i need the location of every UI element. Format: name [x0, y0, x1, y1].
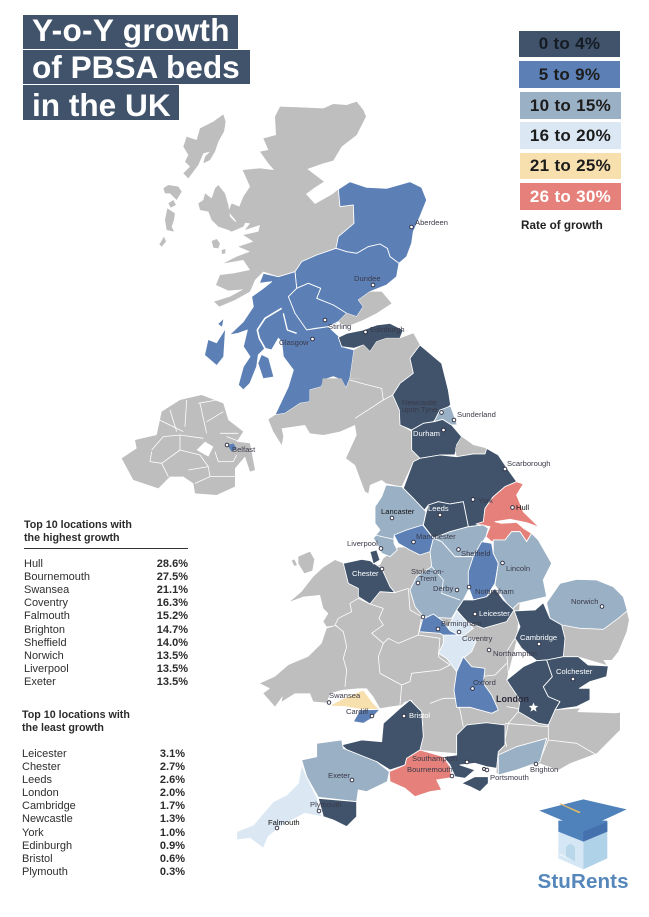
- table: highest growth: Sheffield: [24, 637, 67, 649]
- legend: 10 to 15%: [530, 96, 611, 115]
- table: highest growth: 15.2%: [157, 610, 188, 622]
- region: Colchester: [543, 657, 608, 710]
- region: Nottingham: [468, 542, 498, 600]
- region: Isle of Wight: [462, 777, 488, 792]
- region: Leicester: [457, 588, 514, 628]
- table: highest growth: 27.5%: [157, 571, 188, 583]
- table: least growth: 1.0%: [160, 827, 185, 839]
- region: Dundee: [295, 244, 399, 317]
- region: Sheffield: [433, 525, 488, 557]
- region: Swansea: [329, 690, 380, 710]
- table: highest growth: 13.5%: [157, 663, 188, 675]
- islands: Arran, Islay and Jura: [205, 319, 273, 378]
- city labels: Hull: [516, 503, 529, 512]
- city labels: Sheffield: [461, 549, 490, 558]
- table: least growth: Leeds: [22, 774, 52, 786]
- South West and South Coast regions: [237, 635, 547, 848]
- table: least growth: 0.3%: [160, 866, 185, 878]
- region: Lincoln: [493, 532, 552, 610]
- region: Coventry: [438, 635, 477, 672]
- city labels: Birmingham: [441, 619, 482, 628]
- Wales and West Midlands grey base: [260, 547, 455, 708]
- city labels: Lancaster: [381, 507, 415, 516]
- city labels: Exeter: [328, 771, 350, 780]
- table: least growth: the least growth: [22, 722, 104, 734]
- table: highest growth: 14.0%: [157, 637, 188, 649]
- city labels: Cardiff: [346, 707, 369, 716]
- StuRents logo: [538, 799, 629, 893]
- region: Oxford: [454, 657, 498, 713]
- Northern England regions: [268, 345, 552, 639]
- city labels: upon Tyne: [402, 405, 437, 414]
- region: Chester: [343, 559, 395, 604]
- title: in the UK: [32, 87, 171, 123]
- region: Birmingham: [419, 614, 462, 639]
- legend: 26 to 30%: [530, 187, 611, 206]
- table: least growth: 1.3%: [160, 813, 185, 825]
- city labels: Bournemouth: [407, 765, 453, 774]
- city labels: Chester: [352, 569, 379, 578]
- city labels: Durham: [413, 429, 440, 438]
- city labels: Swansea: [329, 691, 361, 700]
- table: least growth: Newcastle: [22, 813, 73, 825]
- city labels: York: [478, 496, 493, 505]
- city labels: Stoke-on-: [411, 567, 444, 576]
- table: highest growth: Norwich: [24, 650, 64, 662]
- table: highest growth: [24, 519, 188, 688]
- region: Norwich: [547, 579, 627, 629]
- table: least growth: [22, 709, 185, 878]
- table: least growth: London: [22, 787, 59, 799]
- city labels: Colchester: [556, 667, 593, 676]
- table: least growth: 2.0%: [160, 787, 185, 799]
- legend: 0 to 4%: [539, 34, 600, 53]
- legend: 16 to 20%: [530, 126, 611, 145]
- table: least growth: Leicester: [22, 748, 67, 760]
- region: Manchester: [394, 525, 433, 555]
- region: East Anglia south: [562, 611, 629, 665]
- region: Kent and East Sussex: [540, 708, 620, 760]
- region: Bristol: [342, 700, 423, 770]
- table: least growth: 2.6%: [160, 774, 185, 786]
- legend: 21 to 25%: [530, 156, 611, 175]
- region: Bournemouth: [389, 750, 458, 797]
- table: highest growth: Swansea: [24, 584, 69, 596]
- table: highest growth: 13.5%: [157, 676, 188, 688]
- Lough Neagh: [197, 442, 213, 457]
- table: least growth: 0.6%: [160, 853, 185, 865]
- table: highest growth: Brighton: [24, 624, 65, 636]
- region: Cambridge: [514, 603, 565, 661]
- city labels: Southampton: [412, 754, 457, 763]
- city labels: Lincoln: [506, 564, 530, 573]
- table: least growth: Cambridge: [22, 800, 76, 812]
- table: highest growth: Coventry: [24, 597, 68, 609]
- city labels: Norwich: [571, 597, 598, 606]
- table: highest growth: Falmouth: [24, 610, 70, 622]
- table: highest growth: 13.5%: [157, 650, 188, 662]
- city labels: Northampton: [493, 649, 537, 658]
- city labels: Sunderland: [457, 410, 496, 419]
- table: least growth: Edinburgh: [22, 840, 72, 852]
- region: Durham: [412, 419, 462, 458]
- Outer Hebrides and Skye: [159, 114, 247, 254]
- table: least growth: Plymouth: [22, 866, 68, 878]
- city labels: Bristol: [409, 711, 430, 720]
- legend: Rate of growth: [521, 219, 603, 232]
- legend: 5 to 9%: [539, 65, 600, 84]
- region: Plymouth: [318, 798, 357, 827]
- East Anglia and London regions: [480, 579, 629, 760]
- region: Highlands: [214, 102, 366, 307]
- Belfast region: [227, 443, 237, 452]
- region: Sunderland: [434, 406, 457, 425]
- city labels: Edinburgh: [370, 325, 405, 334]
- region: Derby and Stoke: [410, 538, 473, 618]
- table: least growth: 0.9%: [160, 840, 185, 852]
- city labels: Leicester: [479, 609, 510, 618]
- table: highest growth: Exeter: [24, 676, 56, 688]
- city labels: Leeds: [428, 504, 449, 513]
- table: least growth: 2.7%: [160, 761, 185, 773]
- South England grey base: [397, 600, 620, 773]
- Northern Ireland: [122, 395, 255, 495]
- region: Cardiff: [353, 709, 380, 723]
- city labels: Scarborough: [507, 459, 550, 468]
- region: Fife: [338, 292, 392, 327]
- city labels: Liverpool: [347, 539, 378, 548]
- city labels: Dundee: [354, 274, 381, 283]
- region: Leeds: [423, 502, 468, 538]
- region: Newcastle: [393, 345, 451, 430]
- table: highest growth: Hull: [24, 558, 43, 570]
- table: least growth: Bristol: [22, 853, 53, 865]
- city labels: Newcastle: [402, 398, 437, 407]
- city labels: London: [496, 694, 529, 704]
- Scotland regions: [205, 102, 427, 415]
- table: least growth: York: [22, 827, 44, 839]
- region: Falmouth: [237, 765, 322, 848]
- region: Stirling: [288, 283, 347, 330]
- table: least growth: 3.1%: [160, 748, 185, 760]
- table: least growth: Chester: [22, 761, 61, 773]
- title: Y-o-Y growth: [32, 12, 230, 48]
- city labels: Stirling: [328, 322, 351, 331]
- city labels: Nottingham: [475, 587, 514, 596]
- city labels: Derby: [433, 584, 453, 593]
- region: Dumfries and Cumbria: [268, 377, 420, 493]
- region: Teesside: [455, 437, 487, 457]
- city labels: Falmouth: [268, 818, 300, 827]
- title: of PBSA beds: [32, 49, 240, 85]
- table: highest growth: the highest growth: [24, 532, 120, 544]
- region: Aberdeen: [336, 182, 427, 263]
- table: highest growth: 21.1%: [157, 584, 188, 596]
- city labels: Coventry: [462, 634, 493, 643]
- city labels: Glasgow: [279, 338, 309, 347]
- city labels: Plymouth: [310, 800, 342, 809]
- region: Borders: [350, 333, 420, 402]
- city labels: Portsmouth: [490, 773, 529, 782]
- table: highest growth: Top 10 locations with: [24, 519, 132, 531]
- city labels: Manchester: [416, 532, 456, 541]
- region: York: [403, 448, 517, 527]
- table: highest growth: Bournemouth: [24, 571, 90, 583]
- region: London: [507, 660, 560, 725]
- city labels: [225, 218, 604, 830]
- region: Hull: [476, 482, 539, 542]
- city labels: Trent: [419, 574, 437, 583]
- table: highest growth: Liverpool: [24, 663, 69, 675]
- city labels: Cambridge: [520, 633, 557, 642]
- region: Lancaster: [373, 485, 426, 557]
- city labels: Aberdeen: [415, 218, 448, 227]
- region: Coventry north: [448, 611, 473, 637]
- StuRents logo: StuRents: [538, 870, 629, 893]
- region: Edinburgh: [338, 323, 403, 352]
- city labels: Brighton: [530, 765, 558, 774]
- region: Exeter: [302, 740, 389, 802]
- South England border lines: [430, 698, 597, 753]
- legend: [519, 31, 621, 232]
- city labels: Belfast: [232, 445, 256, 454]
- title: [23, 12, 250, 123]
- table: highest growth: 16.3%: [157, 597, 188, 609]
- region: Anglesey: [298, 552, 314, 573]
- table: highest growth: 14.7%: [157, 624, 188, 636]
- table: least growth: Top 10 locations with: [22, 709, 130, 721]
- table: highest growth: 28.6%: [157, 558, 188, 570]
- region: Brighton county: [498, 738, 547, 775]
- region: Southampton and Portsmouth: [443, 723, 505, 778]
- region: Glasgow and Strathclyde: [229, 272, 354, 415]
- region: Wales and West Midlands: [260, 547, 455, 708]
- city labels: Oxford: [473, 678, 496, 687]
- table: least growth: 1.7%: [160, 800, 185, 812]
